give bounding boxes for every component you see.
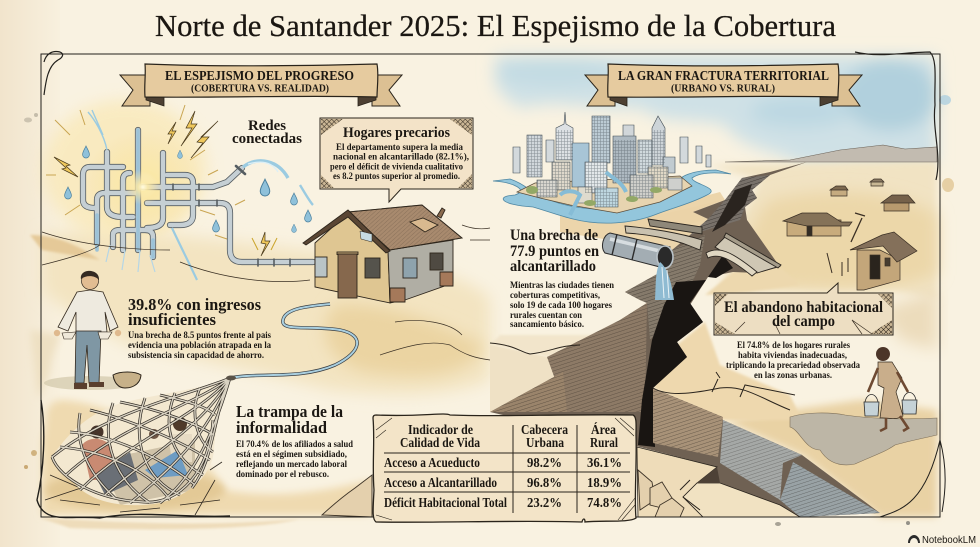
sand dunes lines — [42, 225, 490, 360]
table: indicadores de calidad de vida: Rural — [590, 435, 618, 450]
text: ingresos insuficientes: evidencia una población atrapada en la — [128, 341, 271, 351]
broken pipe and water — [603, 233, 674, 300]
text: brecha en alcantarillado: coberturas competitivas, — [510, 291, 601, 301]
rocks — [322, 470, 684, 517]
callout: abandono habitacional — [714, 283, 893, 335]
leaking joint sparks — [252, 238, 277, 250]
table: indicadores de calidad de vida: Indicador de — [408, 422, 473, 437]
water spray — [88, 110, 313, 280]
table: indicadores de calidad de vida: 23.2% — [527, 496, 562, 511]
net trap with people — [40, 376, 240, 520]
rural houses — [783, 179, 917, 290]
banner: El espejismo del progreso: (COBERTURA VS. REALIDAD) — [191, 82, 329, 94]
water drops — [65, 146, 311, 232]
table: indicadores de calidad de vida: Calidad de Vida — [400, 435, 480, 450]
wash: left sand — [30, 231, 490, 529]
land plates around crack — [490, 192, 802, 420]
NotebookLM watermark: NotebookLM — [922, 535, 976, 546]
ground cracks — [490, 343, 795, 510]
table: indicadores de calidad de vida: 36.1% — [587, 456, 622, 471]
wash: right desert — [708, 160, 937, 517]
text: brecha en alcantarillado: Mientras las ciudades tienen — [510, 281, 615, 291]
table: indicadores de calidad de vida: Cabecera — [521, 422, 568, 437]
woman carrying buckets — [864, 347, 917, 431]
text: trampa de la informalidad: está en el ségimen subsidiado, — [236, 450, 348, 460]
table: indicadores de calidad de vida — [373, 414, 636, 522]
table: indicadores de calidad de vida: Acceso a Alcantarillado — [384, 475, 497, 490]
text: abandono body: en las zonas urbanas. — [754, 371, 832, 381]
text: trampa de la informalidad: La trampa de la — [236, 402, 343, 421]
label: Redes conectadas: conectadas — [232, 131, 302, 147]
callout: Hogares precarios: pero el déficit de vivienda cualitativo — [330, 162, 463, 172]
text: abandono body — [726, 341, 860, 381]
banner: El espejismo del progreso: EL ESPEJISMO DEL PROGRESO — [165, 68, 354, 83]
table: indicadores de calidad de vida: 74.8% — [587, 496, 622, 511]
broken bridge pieces — [625, 219, 781, 276]
text: ingresos insuficientes: insuficientes — [128, 310, 216, 329]
title: Norte de Santander 2025: El Espejismo de la Cobertura — [155, 8, 836, 43]
banner: El espejismo del progreso — [120, 64, 402, 106]
table: indicadores de calidad de vida: Área — [591, 422, 616, 437]
text: brecha en alcantarillado: rurales cuentan con — [510, 311, 583, 321]
text: ingresos insuficientes — [128, 295, 271, 361]
giant crack — [490, 162, 880, 517]
house — [303, 205, 462, 303]
callout: abandono habitacional: El abandono habitacional — [724, 299, 884, 316]
text: brecha en alcantarillado: alcantarillado — [510, 258, 596, 275]
text: abandono body: habita viviendas inadecuadas, — [738, 351, 848, 361]
text: ingresos insuficientes: 39.8% con ingresos — [128, 295, 261, 314]
table: indicadores de calidad de vida: 98.2% — [527, 456, 562, 471]
table: indicadores de calidad de vida: Acceso a Acueducto — [384, 455, 480, 470]
text: brecha en alcantarillado — [510, 227, 615, 330]
callout: Hogares precarios: es 8.2 puntos superior al promedio. — [333, 172, 460, 182]
text: ingresos insuficientes: Una brecha de 8.5 puntos frente al pais — [128, 331, 271, 341]
bowl — [113, 372, 141, 388]
text: brecha en alcantarillado: 77.9 puntos en — [510, 243, 599, 260]
banner: La gran fractura territorial — [585, 64, 862, 106]
hose — [230, 304, 357, 378]
text: brecha en alcantarillado: solo 19 de cada 100 hogares — [510, 301, 612, 311]
callout: abandono habitacional: del campo — [772, 313, 835, 330]
lightning bolts — [54, 111, 270, 256]
label: Redes conectadas — [232, 118, 302, 147]
pipes network — [83, 130, 313, 266]
table: indicadores de calidad de vida: Déficit Habitacional Total — [384, 495, 507, 510]
text: brecha en alcantarillado: sancamiento básico. — [510, 320, 584, 330]
puddle — [790, 413, 937, 465]
text: trampa de la informalidad: informalidad — [236, 418, 328, 437]
callout: Hogares precarios — [320, 118, 473, 202]
callout: Hogares precarios: Hogares precarios — [343, 125, 450, 141]
banner: La gran fractura territorial: LA GRAN FRACTURA TERRITORIAL — [618, 68, 829, 83]
text: brecha en alcantarillado: Una brecha de — [510, 227, 598, 244]
table: indicadores de calidad de vida: 18.9% — [587, 476, 622, 491]
text: abandono body: El 74.8% de los hogares rurales — [737, 341, 850, 351]
man with empty pockets — [44, 271, 136, 390]
mountains — [725, 145, 937, 162]
text: trampa de la informalidad: reflejando un mercado laboral — [236, 460, 347, 470]
text: abandono body: triplicando la precariedad observada — [726, 361, 860, 371]
text: ingresos insuficientes: subsistencia sin capacidad de ahorro. — [128, 351, 264, 361]
wash: sky — [495, 56, 938, 165]
banner: La gran fractura territorial: (URBANO VS. RURAL) — [671, 82, 775, 94]
table: indicadores de calidad de vida: 96.8% — [527, 476, 562, 491]
city with river — [493, 112, 731, 223]
wash: explosion glow — [43, 100, 245, 240]
label: Redes conectadas: Redes — [248, 118, 286, 134]
text: trampa de la informalidad: dominado por el rebusco. — [236, 470, 329, 480]
table: indicadores de calidad de vida: Urbana — [526, 435, 564, 450]
decorative frame — [37, 51, 945, 518]
text: trampa de la informalidad — [236, 402, 354, 480]
callout: Hogares precarios: El departamento supera la media — [336, 143, 463, 153]
text: trampa de la informalidad: El 70.4% de los afiliados a salud — [236, 440, 354, 450]
callout: Hogares precarios: nacional en alcantarillado (82.1%), — [333, 152, 470, 162]
